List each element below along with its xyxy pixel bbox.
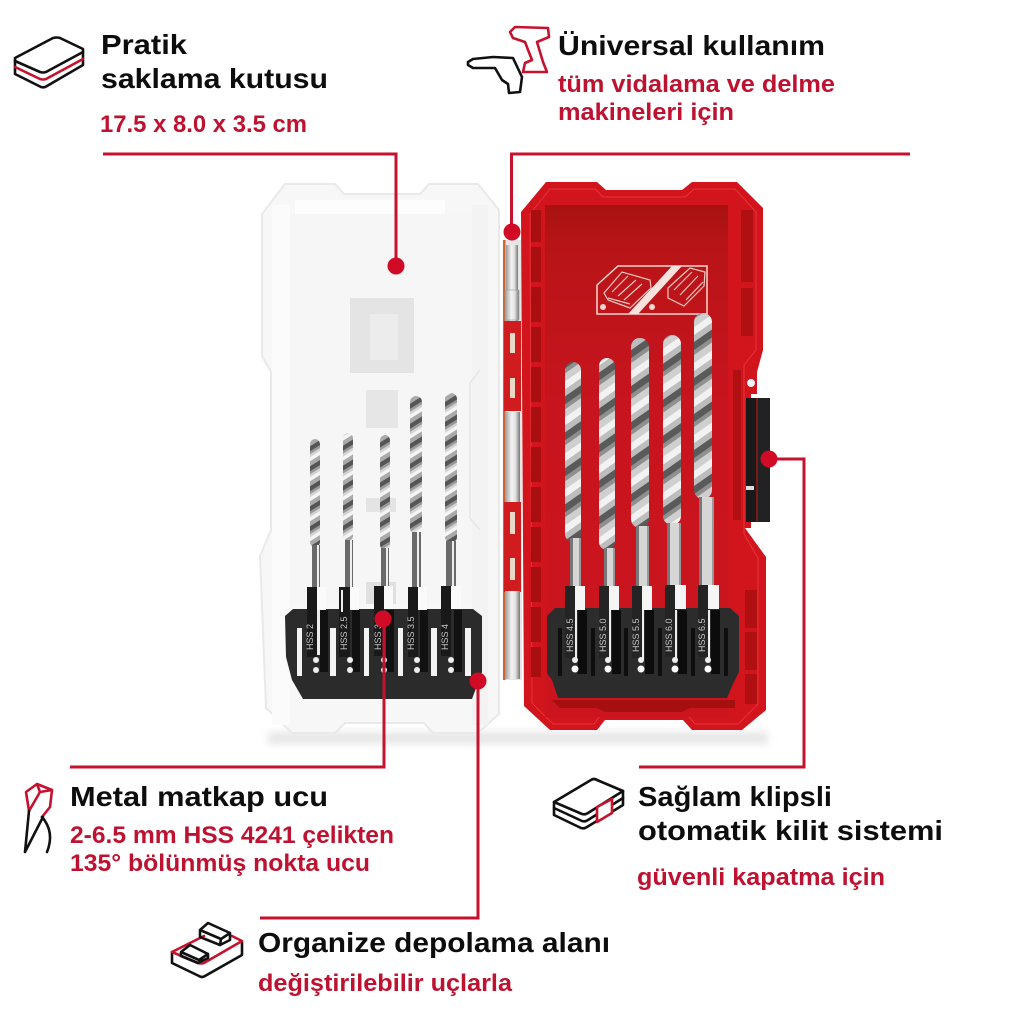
heading: metal drill bit: 135° bölünmüş nokta ucu xyxy=(70,850,370,877)
drill bit 2 mm xyxy=(305,439,328,673)
icon: case label on floor xyxy=(597,266,707,314)
panel: transparent open lid xyxy=(260,184,499,733)
drill bit 2.5 mm xyxy=(339,433,360,673)
lid logo shadow xyxy=(350,298,414,604)
panel: bit insert left xyxy=(285,609,482,699)
drill bit 5 mm: HSS 5.0 xyxy=(598,618,608,652)
callout line: clip lock xyxy=(639,450,804,767)
heading: organized storage: değiştirilebilir uçlarla xyxy=(258,970,513,997)
heading: organized storage xyxy=(258,927,610,997)
icon: clipped box xyxy=(554,779,623,828)
drill bit 3.5 mm xyxy=(406,396,428,673)
callout line: organized storage xyxy=(260,672,486,918)
panel: bit insert right xyxy=(547,608,739,698)
heading: practical storage box: saklama kutusu xyxy=(101,63,328,94)
drill bit 3 mm: HSS 3 xyxy=(373,624,383,650)
heading: sturdy clip lock: güvenli kapatma için xyxy=(637,864,885,891)
drill bit 5.5 mm: HSS 5.5 xyxy=(631,618,641,652)
heading: metal drill bit xyxy=(70,781,394,877)
heading: metal drill bit: Metal matkap ucu xyxy=(70,781,328,812)
case floor xyxy=(545,205,728,717)
drill bit 3.5 mm: HSS 3.5 xyxy=(406,616,416,650)
drill bit 6 mm: HSS 6.0 xyxy=(664,618,674,652)
drill bit 5.5 mm xyxy=(631,338,654,674)
drill bit 4.5 mm: HSS 4.5 xyxy=(565,618,575,652)
drill bit 5 mm xyxy=(598,358,621,674)
icon: organized storage xyxy=(172,923,242,977)
ground shadow xyxy=(268,732,768,744)
right rib compartments xyxy=(733,210,757,704)
heading: universal use: tüm vidalama ve delme xyxy=(558,71,835,98)
panel: hinge strip xyxy=(503,240,522,680)
panel: red open case xyxy=(521,182,766,730)
left rib compartments xyxy=(531,210,541,677)
heading: practical storage box: Pratik xyxy=(101,29,187,60)
heading: universal use xyxy=(558,30,835,126)
icon: drill bit xyxy=(25,784,52,852)
heading: metal drill bit: 2-6.5 mm HSS 4241 çelikten xyxy=(70,822,394,849)
bit set left xyxy=(305,393,462,673)
drill bit 4 mm: HSS 4 xyxy=(440,624,450,650)
callout line: universal use xyxy=(504,154,910,240)
drill bit 6 mm xyxy=(663,335,687,674)
icon: storage box xyxy=(15,38,83,87)
callout line: metal drill bit xyxy=(70,610,392,767)
heading: practical storage box: 17.5 x 8.0 x 3.5 cm xyxy=(100,111,307,138)
icon: locking clip xyxy=(746,379,770,522)
drill bit 4.5 mm xyxy=(565,362,587,674)
drill bit 4 mm xyxy=(440,393,462,673)
drill bit 2 mm: HSS 2 xyxy=(305,624,315,650)
lower lip shade xyxy=(552,700,735,712)
heading: sturdy clip lock: Sağlam klipsli xyxy=(638,781,832,812)
heading: practical storage box xyxy=(100,29,328,138)
drill bit 6.5 mm xyxy=(694,313,720,674)
drill bit 3 mm xyxy=(373,435,394,673)
heading: universal use: makineleri için xyxy=(558,99,734,126)
callout line: storage box xyxy=(103,154,404,274)
heading: organized storage: Organize depolama alanı xyxy=(258,927,610,958)
heading: universal use: Üniversal kullanım xyxy=(558,30,825,61)
drill bit 6.5 mm: HSS 6.5 xyxy=(697,618,707,652)
bit set right xyxy=(565,313,720,674)
heading: sturdy clip lock xyxy=(637,781,943,891)
drill bit 2.5 mm: HSS 2.5 xyxy=(339,616,349,650)
icon: drills xyxy=(468,27,549,93)
heading: sturdy clip lock: otomatik kilit sistemi xyxy=(638,815,943,846)
